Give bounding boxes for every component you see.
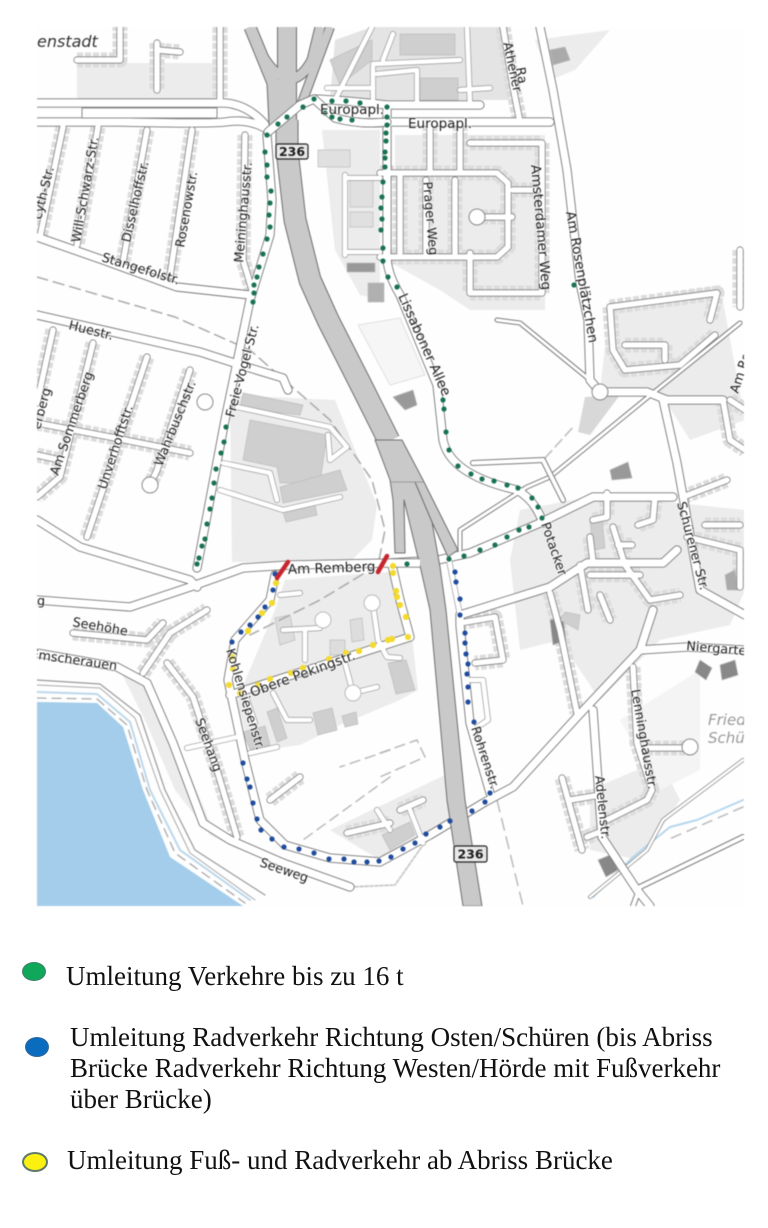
label: Rohrenstr: Rohrenstr.: [467, 725, 502, 791]
label: Meininghausstr: Meininghausstr.: [232, 161, 256, 263]
legend: blue marker: [25, 1037, 49, 1057]
label: Wahrbuschstr: Wahrbuschstr.: [152, 379, 200, 468]
label: Rosenowstr: Rosenowstr.: [173, 170, 201, 249]
label: Am Sommerberg: Am Sommerberg: [48, 370, 97, 477]
route: green detour for traffic up to 16 t: [197, 99, 574, 564]
street labels: [29, 32, 755, 886]
road shield 236 north: 236: [279, 144, 305, 159]
label: Seehang: Seehang: [191, 716, 225, 774]
route: yellow pedestrian and cycling detour: [229, 566, 408, 693]
streets: fill: [187, 27, 490, 843]
label: Ring: Ra: [512, 66, 530, 85]
label: Am Remberg: Am Remberg: [288, 559, 376, 578]
label: Freie-Vogel-Str: Freie-Vogel-Str.: [223, 323, 263, 419]
legend: blue text: [70, 1022, 720, 1114]
water: lake: [37, 702, 243, 906]
legend: green marker: [22, 962, 46, 981]
legend: yellow marker: [22, 1152, 48, 1172]
label: Europaplatz east: Europapl.: [408, 116, 472, 132]
label: Athener: Athener: [499, 41, 524, 94]
label: Friedhof south line: Schü: [708, 729, 744, 747]
label: Lenninghausstr: Lenninghausstr.: [627, 688, 659, 791]
label: Adelenstr: Adelenstr.: [591, 775, 613, 840]
legend: blue text: Brücke Radverkehr Richtung Westen/Hörde mit Fußverkehr: [70, 1053, 720, 1083]
label: Seeweg: Seeweg: [258, 856, 310, 886]
label: Stangefolstr: Stangefolstr.: [100, 250, 182, 288]
legend: blue text: Umleitung Radverkehr Richtung Osten/Schüren (bis Abriss: [70, 1022, 713, 1052]
legend: blue text: über Brücke): [70, 1084, 212, 1114]
legend: green text: Umleitung Verkehre bis zu 16 t: [66, 961, 404, 991]
label: Potacker: Potacker: [537, 520, 570, 578]
dashed rail line and footpaths: [37, 277, 575, 906]
background: [37, 27, 744, 906]
railway double line: [460, 320, 743, 906]
label: Unverhofftstr: Unverhofftstr.: [96, 403, 137, 491]
label: Lissaboner Allee: Lissaboner Allee: [394, 291, 454, 399]
label: Huestr: Huestr.: [67, 318, 115, 344]
streets: casing: [187, 27, 490, 843]
green road passing over the ramps: [268, 99, 387, 132]
label: Amsterdamer Weg: Amsterdamer Weg: [527, 164, 554, 291]
residential building rows: [37, 27, 745, 850]
label: Am Rosenplaetzchen: Am Rosenplätzchen: [562, 210, 601, 344]
water: lake shore and stream: [37, 680, 743, 903]
Am Remberg bridge stub over west ramp: [390, 558, 420, 568]
label: Seehoehe: Seehöhe: [71, 615, 129, 640]
label: Will-Schwarz-Str: Will-Schwarz-Str.: [69, 136, 103, 244]
label: Prager Weg: Prager Weg: [419, 181, 440, 256]
label: Schuerener Str: Schürener Str.: [673, 500, 711, 592]
cul-de-sacs and turning loops: [82, 108, 698, 755]
label: district: enstadt: [37, 32, 99, 51]
label: Kohlensiepenstr: Kohlensiepenstr.: [222, 647, 267, 752]
road shield 236 south: 236: [457, 846, 484, 862]
motorway B236 with ramps: [250, 27, 482, 906]
buildings: [240, 34, 738, 877]
label: Obere Pekingstr: Obere Pekingstr.: [248, 648, 358, 701]
closure markers: red bars at bridge ends: [277, 556, 387, 578]
label: Disselhoffstr: Disselhoffstr.: [119, 160, 153, 244]
legend: yellow text: Umleitung Fuß- und Radverkehr ab Abriss Brücke: [67, 1145, 613, 1175]
map: detour routes around Am Remberg bridge: [36, 26, 745, 907]
label: Europaplatz west: Europapl.: [320, 102, 384, 118]
route: blue cycling detour: [232, 572, 490, 862]
label: g fragment: g: [37, 594, 45, 609]
land-use areas: [77, 27, 745, 860]
